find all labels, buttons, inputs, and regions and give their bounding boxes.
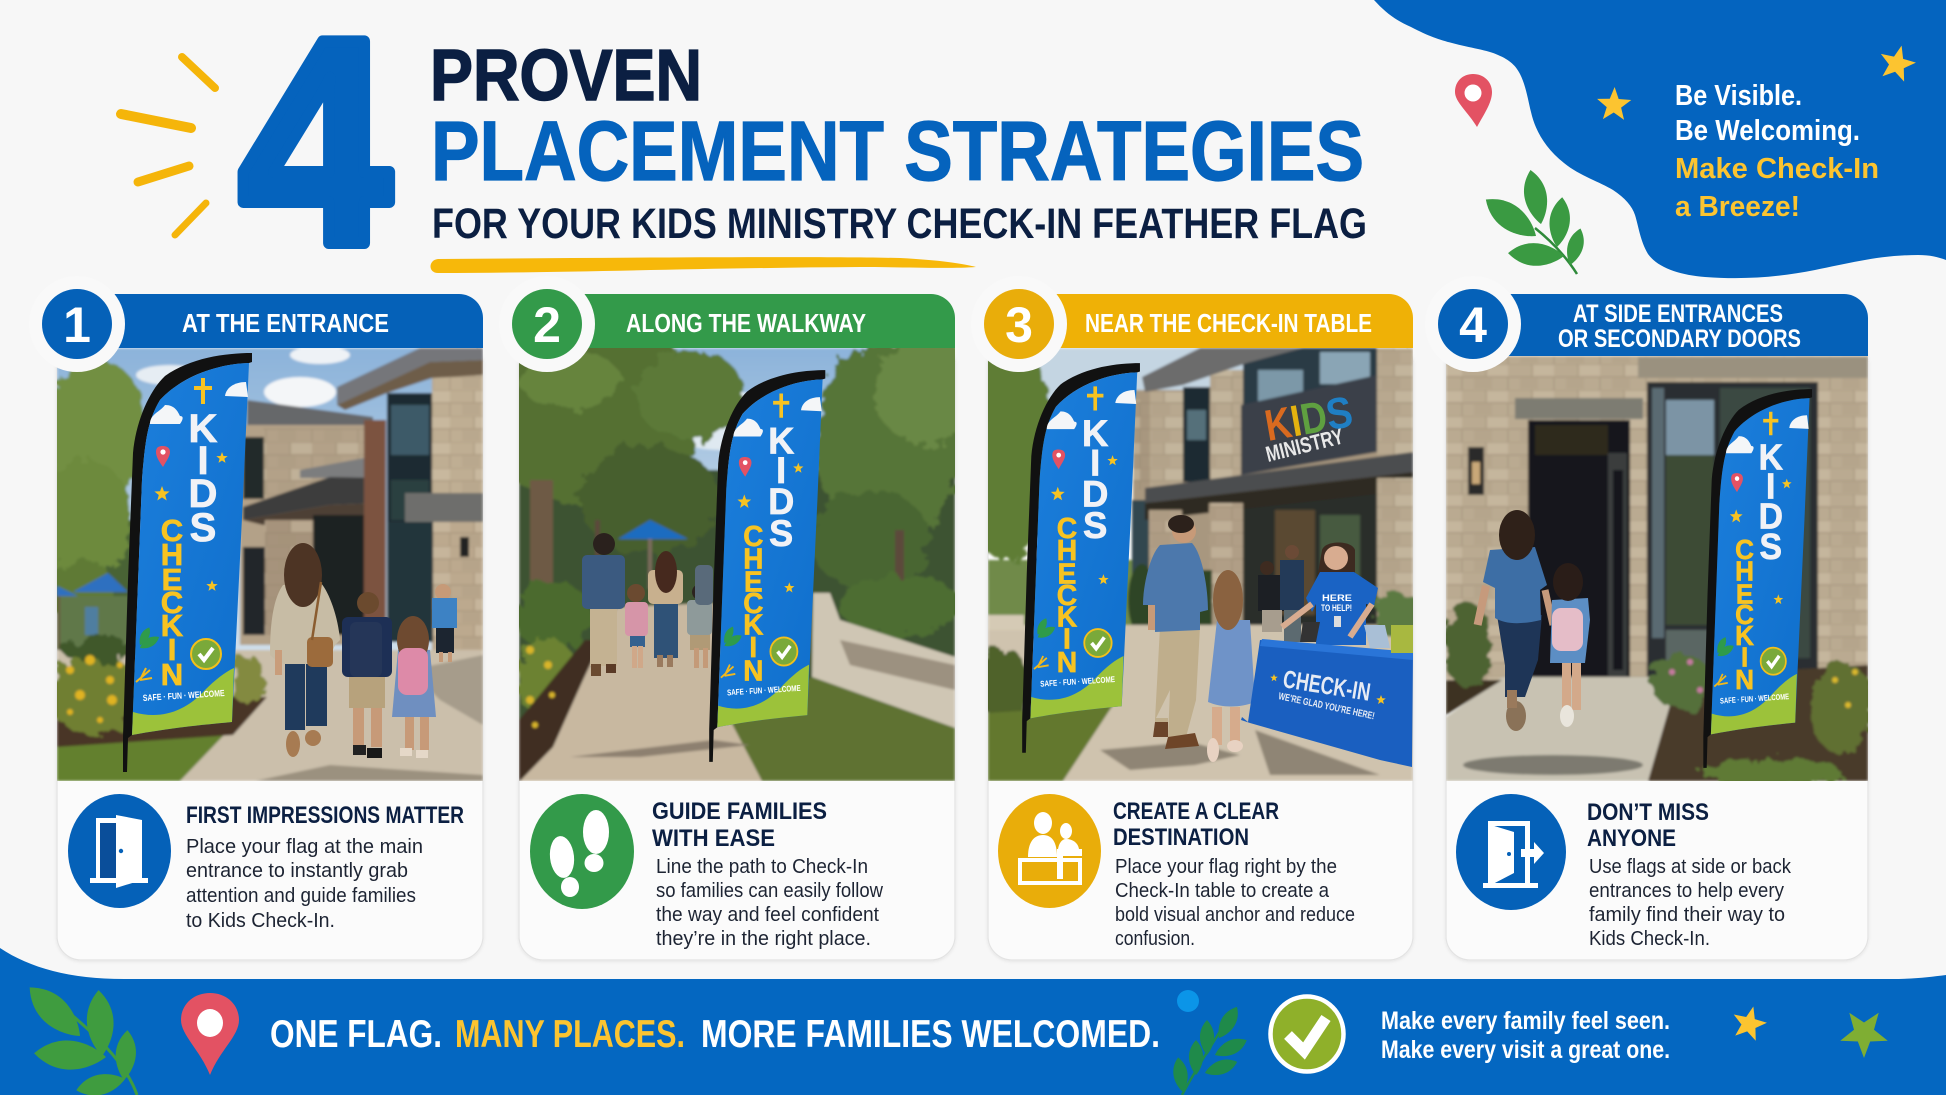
flag 3: K	[1082, 413, 1109, 454]
panel 3: near the check-in table	[955, 276, 1422, 960]
icon: stars top right	[1596, 41, 1919, 120]
body 3: bold visual anchor and reduce	[1115, 904, 1355, 926]
flag 2: E	[744, 566, 763, 599]
check-in table with staff: WE'RE GLAD YOU'RE HERE!	[1277, 691, 1376, 722]
flag 1: SAFE · FUN · WELCOME	[143, 688, 225, 703]
number badge 4: 4	[1459, 297, 1487, 353]
body 1: Place your flag at the main	[186, 836, 423, 858]
title 2: GUIDE FAMILIES	[652, 798, 827, 825]
check-in table with staff: HERE	[1322, 593, 1352, 603]
flag 4: I	[1741, 641, 1748, 673]
flag 2: I	[776, 450, 786, 491]
body 3: confusion.	[1115, 928, 1195, 950]
body 3	[1115, 856, 1355, 950]
flag 3	[1022, 363, 1140, 753]
icon: people at check-in desk	[998, 794, 1101, 908]
people: father and daughter	[1143, 515, 1255, 762]
body 2: the way and feel confident	[656, 904, 879, 926]
icon: footprints	[530, 794, 634, 909]
body 1	[186, 836, 423, 932]
body 1: attention and guide families	[186, 885, 416, 907]
body 4: Kids Check-In.	[1589, 928, 1710, 950]
body 4: Use flags at side or back	[1589, 856, 1792, 878]
body 3: Check-In table to create a	[1115, 880, 1330, 902]
check-in table with staff: CHECK-IN	[1281, 665, 1372, 707]
top right blue corner shape	[1374, 0, 1946, 278]
trees left	[57, 520, 137, 660]
icon: green check badge	[1270, 996, 1344, 1072]
flag 4: K	[1735, 619, 1754, 651]
title: PROVEN	[430, 36, 702, 116]
flag 2: K	[743, 609, 764, 642]
flag 1: C	[161, 585, 183, 620]
flag 2: C	[743, 588, 763, 620]
flag 4: H	[1735, 555, 1754, 587]
slogan top right: Be Visible.	[1675, 80, 1802, 112]
flag 4: SAFE · FUN · WELCOME	[1720, 692, 1789, 706]
people: mother and daughter	[1474, 510, 1590, 731]
title 3: DESTINATION	[1113, 824, 1249, 851]
blue dot	[1177, 990, 1199, 1012]
header text 1: AT THE ENTRANCE	[182, 308, 389, 338]
band tagline: Make every visit a great one.	[1381, 1036, 1670, 1064]
body 2: Line the path to Check-In	[656, 856, 868, 878]
flag 4: E	[1736, 577, 1753, 610]
number badge 2	[499, 276, 595, 372]
flag 3: C	[1057, 580, 1077, 612]
storefront sign: MINISTRY	[1263, 423, 1346, 467]
storefront sign: S	[1322, 387, 1356, 440]
yellow brush underline	[430, 257, 976, 273]
flag 1: C	[161, 513, 183, 548]
people: mother and children	[270, 543, 457, 758]
flag 3: SAFE · FUN · WELCOME	[1040, 674, 1116, 689]
icon: green star in band	[1840, 1013, 1888, 1058]
icon: green leaf sprig	[1478, 168, 1588, 274]
icon: left leaf sprig in band	[20, 977, 138, 1095]
title: PLACEMENT STRATEGIES	[431, 104, 1364, 198]
card 4 base	[1446, 340, 1868, 960]
flag 2: S	[769, 512, 793, 554]
panel 4: at side entrances	[1425, 276, 1874, 960]
number badge 1: 1	[63, 297, 91, 353]
flag 1: E	[162, 562, 182, 597]
flag 2: D	[768, 480, 794, 522]
tent background	[73, 573, 128, 592]
number badge 3: 3	[1005, 297, 1033, 353]
title 4: ANYONE	[1587, 825, 1676, 852]
slogan top right	[1675, 80, 1879, 223]
band headline: MORE FAMILIES WELCOMED.	[701, 1013, 1160, 1056]
flag 4: K	[1759, 437, 1783, 478]
flag 1: S	[190, 506, 216, 550]
flag 1: H	[161, 537, 183, 572]
check-in table with staff: TO HELP!	[1321, 603, 1352, 613]
flag 3: D	[1082, 473, 1108, 514]
slogan top right: Be Welcoming.	[1675, 115, 1860, 147]
flag 2: I	[749, 632, 757, 664]
flag 4: C	[1735, 533, 1754, 565]
flag 2: N	[743, 655, 763, 688]
body 1: entrance to instantly grab	[186, 860, 408, 882]
band headline: ONE FLAG.	[270, 1013, 442, 1056]
header text 4: AT SIDE ENTRANCES	[1573, 300, 1783, 328]
map pin icon	[1455, 74, 1492, 127]
flag 3: I	[1090, 442, 1100, 484]
flag 3: N	[1057, 647, 1077, 679]
people: family walking	[582, 533, 713, 676]
flag 4	[1703, 389, 1812, 768]
panel 1: at the entrance	[29, 276, 483, 960]
slogan top right: a Breeze!	[1675, 191, 1800, 223]
flag 3: E	[1057, 558, 1076, 591]
flag 1: I	[168, 632, 176, 667]
flag 2: H	[743, 543, 763, 575]
body 3: Place your flag right by the	[1115, 856, 1337, 878]
flag 3: H	[1057, 535, 1077, 567]
card 1 base	[57, 340, 483, 960]
header text 2: ALONG THE WALKWAY	[626, 308, 866, 338]
flag 1: K	[189, 407, 218, 451]
number badge 3	[971, 276, 1067, 372]
title 2	[652, 798, 827, 852]
photo 4: side entrance	[1444, 356, 1874, 786]
title 2: WITH EASE	[652, 825, 775, 852]
flag 2: K	[768, 420, 795, 461]
band tagline: Make every family feel seen.	[1381, 1007, 1670, 1035]
photo 2: family on walkway	[519, 348, 955, 781]
band headline: MANY PLACES.	[455, 1013, 685, 1056]
storefront sign: D	[1297, 392, 1331, 445]
number badge 4	[1425, 276, 1521, 372]
number badge 1	[29, 276, 125, 372]
panel 2: along the walkway	[512, 289, 956, 962]
flag 4: D	[1759, 496, 1783, 537]
icon: open door	[68, 794, 171, 908]
icon: yellow star in band	[1729, 1002, 1770, 1042]
middle building	[246, 398, 374, 427]
flag 4: I	[1766, 466, 1775, 507]
title 4: DON’T MISS	[1587, 799, 1709, 826]
band headline	[270, 1013, 1160, 1056]
flag 3: K	[1057, 601, 1077, 633]
number badge 2: 2	[533, 297, 561, 353]
header text 3: NEAR THE CHECK-IN TABLE	[1085, 308, 1372, 338]
header bar 4	[1505, 294, 1868, 356]
yellow burst rays	[121, 57, 215, 235]
header bar 1	[100, 294, 483, 348]
background visitors	[1258, 545, 1304, 642]
header text 4	[1558, 300, 1801, 353]
photo 1: family walking to entrance	[39, 346, 483, 781]
flag 1: N	[161, 657, 183, 692]
flag 3: I	[1063, 623, 1071, 656]
body 2: so families can easily follow	[656, 880, 884, 902]
flag 2: C	[743, 520, 763, 553]
storefront sign: K	[1261, 398, 1296, 451]
flag 1: K	[161, 608, 184, 643]
slogan top right: Make Check-In	[1675, 153, 1879, 185]
title: FOR YOUR KIDS MINISTRY CHECK-IN FEATHER FLAG	[432, 200, 1367, 248]
right building	[364, 420, 386, 625]
flag 1: D	[189, 472, 217, 516]
icon: door with exit arrow	[1456, 794, 1566, 910]
body 2: they’re in the right place.	[656, 928, 871, 950]
storefront sign: I	[1287, 396, 1305, 446]
body 1: to Kids Check-In.	[186, 910, 335, 932]
check-in table with staff	[1241, 542, 1413, 767]
title 4	[1587, 799, 1709, 852]
title	[430, 36, 1367, 248]
title 3	[1113, 798, 1279, 851]
card 3 base	[988, 340, 1413, 960]
flag 4: N	[1735, 663, 1754, 695]
title 1: FIRST IMPRESSIONS MATTER	[186, 802, 464, 829]
title 3: CREATE A CLEAR	[1113, 798, 1279, 825]
icon: band map pin	[181, 993, 239, 1075]
photo 3: check-in table scene	[988, 348, 1413, 781]
bottom blue band	[0, 948, 1946, 1095]
storefront sign	[1265, 397, 1352, 462]
flag 4: S	[1760, 527, 1782, 567]
header bar 2	[560, 294, 955, 348]
header bar 3	[1030, 294, 1413, 348]
header text 4: OR SECONDARY DOORS	[1558, 325, 1801, 353]
flag 3: C	[1057, 513, 1077, 545]
flag 2	[709, 370, 825, 762]
flag 4: C	[1735, 598, 1754, 630]
icon: small dark leaf sprig	[1171, 1003, 1250, 1095]
band tagline	[1381, 1007, 1670, 1064]
flag 3: S	[1083, 505, 1107, 546]
body 2	[656, 856, 884, 950]
body 4: family find their way to	[1589, 904, 1785, 926]
body 4	[1589, 856, 1792, 950]
flag 2: SAFE · FUN · WELCOME	[727, 684, 801, 697]
card 2 base	[519, 340, 955, 960]
flag 1	[123, 353, 252, 772]
ground	[57, 650, 483, 781]
body 4: entrances to help every	[1589, 880, 1784, 902]
flag 1: I	[197, 439, 209, 483]
